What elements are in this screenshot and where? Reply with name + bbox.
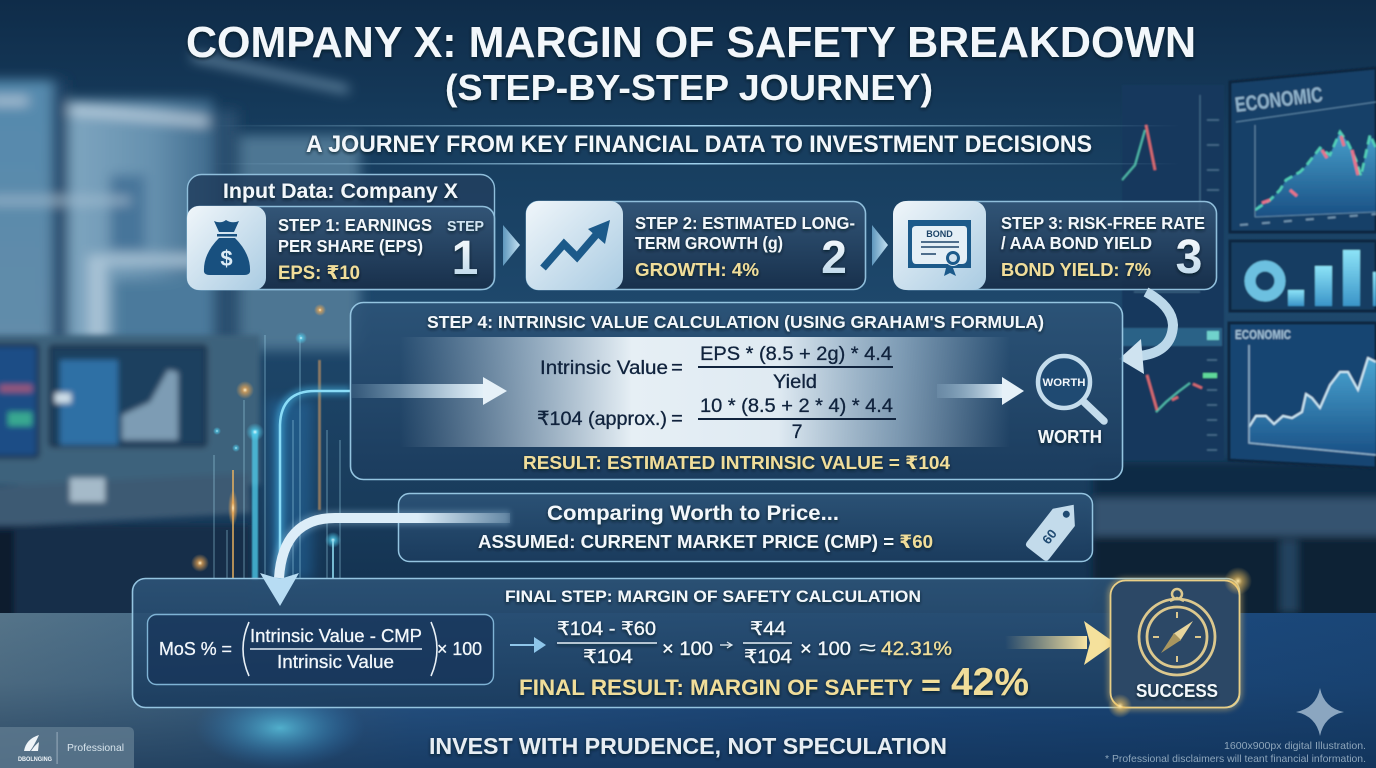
- right dashboards: [1122, 68, 1376, 468]
- box: MoS formula: Intrinsic Value - CMP: [250, 626, 422, 646]
- step 3 text: BOND YIELD: 7%: [1001, 260, 1151, 280]
- step 2 text: GROWTH: 4%: [635, 260, 759, 280]
- assumed price: ASSUMEd: CURRENT MARKET PRICE (CMP) = ₹60: [478, 531, 933, 552]
- formula: substituted values: ₹104 (approx.): [537, 408, 667, 430]
- heading: comparing: Comparing Worth to Price...: [547, 502, 839, 525]
- formula: Graham: Intrinsic Value: [540, 357, 668, 379]
- step 3 text: STEP 3: RISK-FREE RATE: [1001, 213, 1205, 233]
- icon: bond certificate: [893, 201, 986, 290]
- step 1 text: [278, 215, 432, 284]
- icon: magnifier worth: [1038, 356, 1104, 421]
- logo name: DBOLNGING: [18, 757, 52, 763]
- step 2 text: STEP 2: ESTIMATED LONG-: [635, 213, 855, 233]
- label: worth: WORTH: [1038, 427, 1102, 447]
- step 3 text: [1001, 213, 1205, 280]
- formula band: [400, 337, 1010, 447]
- box: MoS formula: Intrinsic Value: [277, 652, 394, 672]
- panel: step 4 intrinsic value: [350, 302, 1122, 480]
- footer slogan: INVEST WITH PRUDENCE, NOT SPECULATION: [429, 733, 947, 759]
- formula: substituted values: 10 * (8.5 + 2 * 4) * 4.4: [700, 395, 893, 417]
- box: MoS formula: [148, 614, 494, 684]
- arrow: step 2 to 3: [872, 225, 888, 266]
- step number 3: 3: [1176, 231, 1202, 284]
- fine print: [1105, 740, 1366, 765]
- formula: Graham: =: [671, 357, 683, 379]
- formula: Graham: [540, 343, 893, 393]
- icon: growth arrow: [526, 201, 623, 290]
- step number 1: 1: [452, 232, 478, 285]
- icon: sparkle watermark: [1296, 688, 1344, 736]
- formula: Graham: Yield: [773, 371, 817, 393]
- final result: FINAL RESULT: MARGIN OF SAFETY: [519, 675, 913, 700]
- formula: substituted values: =: [671, 408, 683, 430]
- calculation fractions: × 100: [800, 639, 851, 660]
- icon: money bag: [187, 206, 266, 290]
- formula: Graham: EPS * (8.5 + 2g) * 4.4: [700, 343, 892, 365]
- calculation fractions: 42.31%: [881, 639, 952, 660]
- result: intrinsic value: RESULT: ESTIMATED INTRINSIC VALUE = ₹104: [523, 452, 951, 473]
- icon: price tag: [1024, 496, 1085, 562]
- arrow: formula to calculation: [510, 637, 546, 653]
- step number 2: 2: [821, 231, 847, 283]
- step 2 text: [635, 213, 855, 280]
- panel: success: [1108, 567, 1252, 718]
- fine print: 1600x900px digital Illustration.: [1224, 740, 1366, 752]
- panel: input data, step 1: [187, 174, 494, 290]
- arrow to worth: [937, 377, 1024, 405]
- final result: [519, 661, 1029, 704]
- right dashboards: ECONOMIC: [1234, 83, 1324, 117]
- icon: price tag: 60: [1039, 526, 1060, 547]
- panel: final step: [132, 578, 1240, 708]
- calculation fractions: ₹104: [583, 647, 633, 668]
- icon: compass: [1139, 589, 1215, 675]
- logo badge: [0, 727, 134, 768]
- calculation fractions: ≈: [859, 635, 876, 660]
- step number 1: [447, 219, 484, 285]
- card: step 1: [188, 206, 494, 290]
- step number 1: STEP: [447, 219, 484, 235]
- subtitle: A JOURNEY FROM KEY FINANCIAL DATA TO INVESTMENT DECISIONS: [306, 131, 1092, 158]
- heading: input data: Input Data: Company X: [223, 180, 458, 203]
- right dashboards: ECONOMIC: [1235, 327, 1291, 342]
- calculation fractions: ₹104: [744, 647, 792, 668]
- step 1 text: EPS: ₹10: [278, 263, 360, 284]
- formula: substituted values: [537, 395, 896, 443]
- icon: bond certificate: BOND: [926, 229, 953, 239]
- calculation fractions: ₹104 - ₹60: [557, 619, 656, 640]
- icon: money bag: $: [220, 246, 233, 271]
- card: step 3: [893, 201, 1216, 290]
- left blurred monitors: [0, 335, 260, 625]
- calculation fractions: × 100: [662, 639, 713, 660]
- arrow into formula: [352, 377, 507, 405]
- final result: 42%: [951, 661, 1029, 704]
- card: step 2: [526, 201, 866, 290]
- heading: step 4: STEP 4: INTRINSIC VALUE CALCULATION (USING GRAHAM'S FORMULA): [427, 312, 1044, 332]
- arrow: step 1 to 2: [503, 225, 520, 266]
- gold glints: [1108, 567, 1252, 718]
- final result: =: [921, 669, 941, 702]
- heading: final step: FINAL STEP: MARGIN OF SAFETY CALCULATION: [505, 587, 921, 606]
- formula: substituted values: 7: [792, 421, 802, 443]
- step 1 text: PER SHARE (EPS): [278, 236, 423, 256]
- icon: logo leaf: [24, 735, 39, 751]
- fine print: * Professional disclaimers will teant financial information.: [1105, 753, 1366, 765]
- panel: comparing worth to price: [398, 494, 1092, 562]
- step 3 text: / AAA BOND YIELD: [1001, 233, 1152, 253]
- title: COMPANY X: MARGIN OF SAFETY BREAKDOWN: [186, 18, 1196, 67]
- title: (STEP-BY-STEP JOURNEY): [445, 67, 933, 108]
- floor band: [0, 613, 1376, 768]
- icon: magnifier worth: WORTH: [1042, 377, 1086, 389]
- right desk blur: [1093, 462, 1376, 621]
- label: success: SUCCESS: [1136, 681, 1218, 701]
- step 2 text: TERM GROWTH (g): [635, 233, 783, 253]
- curved arrow: price to MoS formula: [260, 518, 510, 606]
- badge label: Professional: [67, 742, 124, 754]
- box: MoS formula: MoS % =: [159, 638, 232, 659]
- box: MoS formula: × 100: [437, 639, 482, 659]
- title: [186, 18, 1196, 108]
- step 1 text: STEP 1: EARNINGS: [278, 215, 432, 235]
- calculation fractions: ₹44: [750, 619, 786, 640]
- arrow: gold to success: [1005, 621, 1115, 665]
- curved arrow: step 3 to worth: [1119, 292, 1173, 374]
- calculation fractions: [557, 619, 952, 668]
- glowing vertical light streaks: [191, 304, 350, 580]
